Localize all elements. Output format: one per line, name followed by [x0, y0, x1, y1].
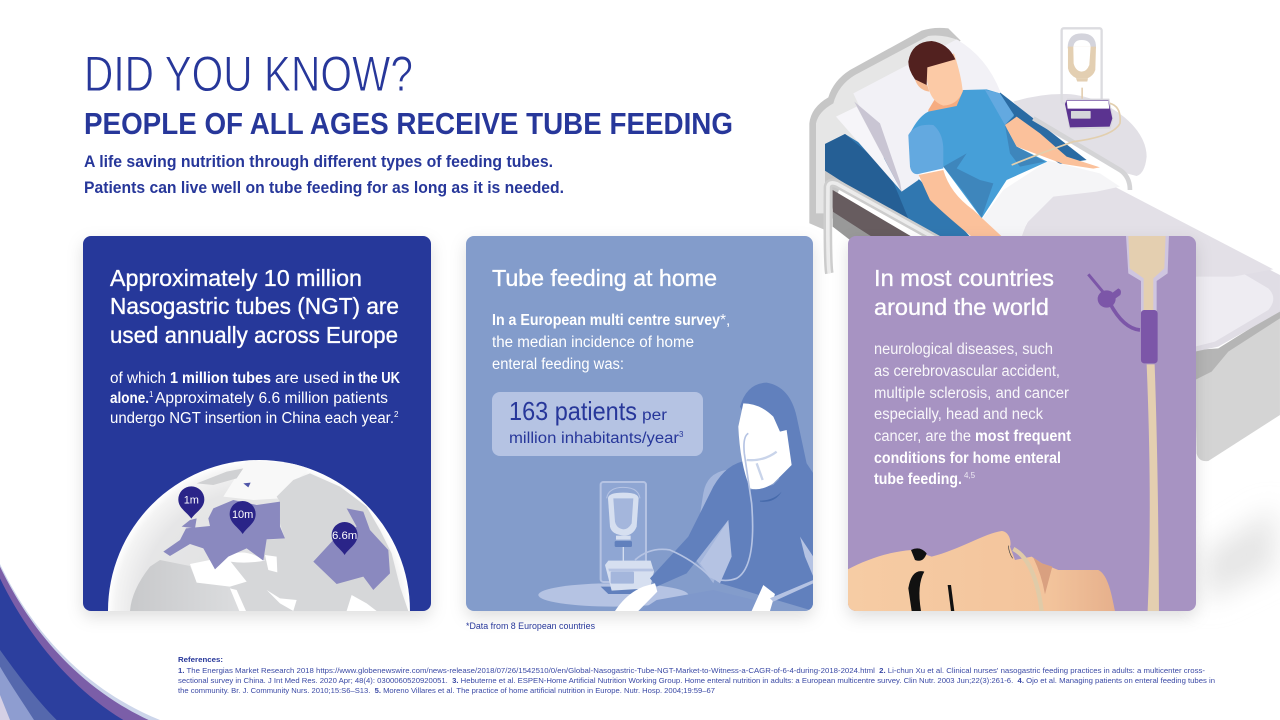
shirt — [910, 89, 1047, 218]
pin: 1m — [178, 486, 204, 519]
feeding tube — [1012, 103, 1120, 165]
panel: tube feeding at home — [466, 236, 813, 611]
rails — [828, 183, 938, 273]
panel heading: Approximately 10 million — [110, 265, 362, 291]
panel body text: most frequent — [975, 428, 1071, 445]
headboard — [809, 28, 961, 230]
bed foot end — [1195, 232, 1280, 602]
callout: million inhabitants/year — [509, 430, 679, 447]
panel body text: alone. — [110, 390, 149, 407]
panel body text: multiple sclerosis, and cancer — [874, 385, 1069, 402]
illustration: woman with feeding pump at home — [538, 383, 813, 611]
iv stand — [1062, 28, 1102, 103]
mattress — [825, 134, 970, 237]
footnote: *Data from 8 European countries — [466, 621, 595, 631]
references: 1. The Energias Market Research 2018 https://www.globenewswire.com/news-release/2018/07/26/1542510/0/en/Global-Nasogastric-Tube-NGT-Market-to-Witness-a-CAGR-of-6-4-during-2018-2024.html 2. Li-chun Xu et al. Clinical nurses' nasogastric feeding practices in adults: a multicenter cross- — [178, 666, 1206, 675]
illustration: nasogastric tube and face — [847, 235, 1169, 611]
illustration: patient in hospital bed — [809, 28, 1280, 602]
pillows — [853, 39, 1001, 192]
panel body text: 1 million tubes — [170, 370, 271, 387]
bedside table — [1013, 94, 1147, 176]
pin: 6.6m: 6.6m — [332, 530, 357, 542]
panel body text — [110, 370, 401, 427]
panel body text: tube feeding. — [874, 471, 962, 488]
panel body text: are used — [275, 370, 339, 387]
panel body text: 4,5 — [964, 471, 976, 480]
panel heading: Nasogastric tubes (NGT) are — [110, 293, 399, 319]
callout: 163 patients — [509, 396, 637, 426]
references — [178, 655, 1215, 695]
callout: per — [642, 407, 667, 424]
panel body text: 1 — [149, 390, 154, 399]
references: sectional survey in China. J Int Med Res. 2020 Apr; 48(4): 0300060520920051. 3. Hebuterne et al. ESPEN-Home Artificial Nutrition Working Group. Home enteral nutrition in adults: a European multicentre survey. Clin Nutr. 2003 Jun;22(3):261-6. 4. Ojo et al. Managing patients on enteral feeding tubes in — [178, 676, 1215, 685]
panel body text: conditions for home enteral — [874, 450, 1061, 467]
panel body text: *, — [720, 312, 730, 329]
panel body text: in the UK — [343, 370, 401, 387]
panel heading: around the world — [874, 294, 1049, 320]
panel body text: neurological diseases, such — [874, 341, 1053, 358]
panel body text: enteral feeding was: — [492, 356, 624, 373]
panel heading — [874, 265, 1054, 320]
panel body text: the median incidence of home — [492, 334, 694, 351]
blanket — [1020, 186, 1273, 277]
panel body text — [492, 312, 730, 373]
panel heading: In most countries — [874, 265, 1054, 291]
pin: 1m: 1m — [184, 494, 199, 506]
head — [924, 53, 963, 106]
feeding pump — [1065, 99, 1113, 129]
globe map — [108, 460, 410, 611]
panel body text: In a European multi centre survey — [492, 312, 720, 329]
panel body text: undergo NGT insertion in China each year. — [110, 410, 394, 427]
bed base — [833, 190, 912, 237]
panel body text: Approximately 6.6 million patients — [155, 390, 388, 407]
arms — [919, 170, 1002, 237]
panel body text: especially, head and neck — [874, 406, 1043, 423]
callout — [492, 392, 703, 456]
panel heading — [110, 265, 399, 348]
panel body text — [874, 341, 1071, 488]
pin: 10m — [230, 501, 256, 534]
pin: 10m: 10m — [232, 509, 253, 521]
panel heading: Tube feeding at home — [492, 265, 717, 291]
panel body text: cancer, are the — [874, 428, 971, 445]
heading: PEOPLE OF ALL AGES RECEIVE TUBE FEEDING — [84, 106, 733, 141]
references: References: — [178, 655, 223, 664]
panel heading: used annually across Europe — [110, 322, 398, 348]
intro text — [84, 152, 564, 197]
intro text: Patients can live well on tube feeding for as long as it is needed. — [84, 178, 564, 197]
panel body text: as cerebrovascular accident, — [874, 363, 1060, 380]
panel body text: of which — [110, 370, 166, 387]
panel: nasogastric tubes — [83, 236, 431, 611]
references: the community. Br. J. Community Nurs. 2010;15:S6–S13. 5. Moreno Villares et al. The practice of home artificial nutrition in Europe. Nutr. Hosp. 2004;19:59–67 — [178, 686, 715, 695]
pin: 6.6m — [332, 522, 358, 555]
decorative swoosh bottom left — [0, 564, 160, 720]
intro text: A life saving nutrition through different types of feeding tubes. — [84, 152, 553, 171]
panel body text: 2 — [394, 410, 399, 419]
neck — [928, 90, 964, 113]
callout: 3 — [679, 430, 684, 439]
panel: conditions — [847, 235, 1196, 611]
title: DID YOU KNOW? — [84, 46, 413, 102]
